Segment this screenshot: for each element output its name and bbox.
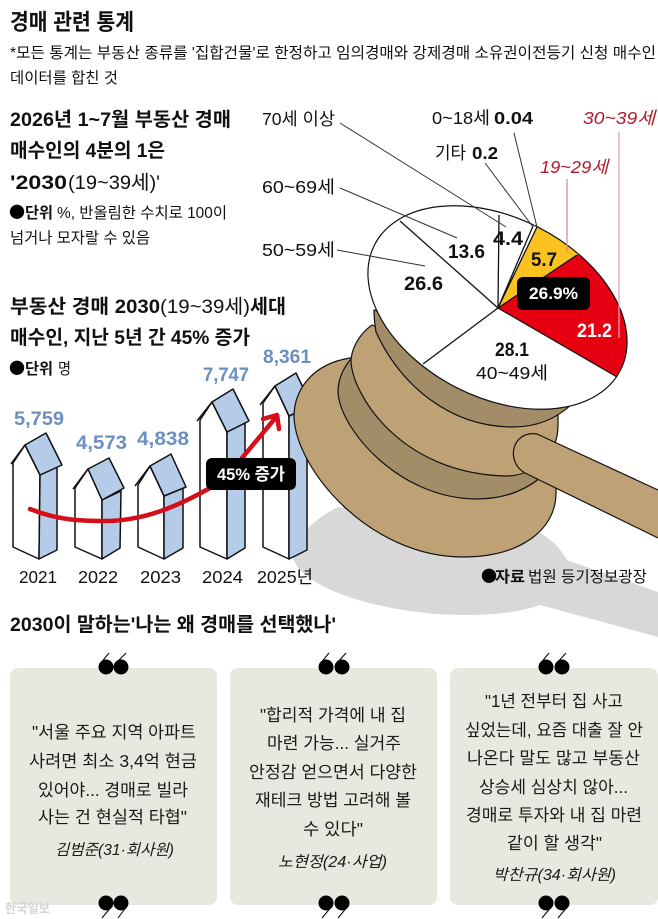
- quote text: "서울 주요 지역 아파트: [32, 722, 196, 742]
- year labels: 2021: [19, 567, 57, 587]
- unit note: bar chart: [9, 355, 71, 379]
- heading: pie chart: 2026년 1~7월 부동산 경매: [10, 109, 231, 131]
- subtitle note: [10, 44, 656, 87]
- pie base: [334, 165, 658, 450]
- unit note: pie chart: [9, 199, 227, 247]
- panel: quote 1: [10, 653, 217, 918]
- callout: 26.9%: [517, 277, 590, 310]
- watermark: 한국일보: [5, 901, 50, 916]
- value labels: 5,759: [14, 409, 64, 430]
- unit note: pie chart: ●: [9, 199, 25, 223]
- quote text: 있어야... 경매로 빌라: [38, 780, 188, 800]
- subtitle note: 데이터를 합친 것: [10, 69, 118, 87]
- year labels: 2024: [202, 567, 243, 587]
- heading: bar chart: (19~39세): [160, 296, 250, 318]
- unit note: bar chart: 단위: [25, 360, 53, 378]
- value labels: [14, 347, 311, 454]
- value labels: 4,838: [137, 429, 189, 450]
- year labels: 2023: [140, 567, 181, 587]
- house 2022: [73, 458, 124, 559]
- pie outline: [334, 165, 658, 450]
- icon: opening quote: [319, 653, 349, 674]
- source: 자료: [495, 568, 525, 586]
- panel: quote 2: [230, 653, 437, 918]
- pie labels: 0~18세: [432, 108, 490, 128]
- card background: [230, 668, 437, 905]
- heading: pie chart: (19~39세)': [68, 172, 160, 194]
- slice: 19~29 yellow: [500, 228, 578, 306]
- pie values: 4.4: [493, 229, 523, 250]
- quote text: 수 있다": [303, 819, 363, 839]
- house 2021: [11, 433, 62, 559]
- source: ●: [481, 563, 497, 587]
- subtitle note: *모든 통계는 부동산 종류를 '집합건물'로 한정하고 임의경매와 강제경매 소유권이전등기 신청 매수인: [10, 44, 656, 62]
- gavel upper head: [351, 325, 558, 476]
- card background: [10, 668, 217, 905]
- heading: pie chart: '2030: [10, 172, 67, 194]
- quote text: 경매로 투자와 내 집 마련: [466, 805, 642, 825]
- house 2024: [197, 389, 249, 559]
- unit note: pie chart: 넘거나 모자랄 수 있음: [10, 229, 150, 247]
- pie leader lines: [337, 123, 619, 338]
- quote text: 상승세 심상치 않아...: [479, 777, 628, 797]
- heading: bar chart: 세대: [250, 296, 286, 318]
- icon: closing quote: [539, 896, 569, 918]
- quote text: [465, 691, 643, 853]
- gavel lower head: [294, 350, 556, 557]
- quote text: 나온다 말도 많고 부동산: [467, 748, 640, 768]
- pie labels: 50~59세: [262, 240, 335, 260]
- quote text: "합리적 가격에 내 집: [260, 705, 406, 725]
- pie labels: 70세 이상: [262, 109, 335, 129]
- quote text: [249, 705, 417, 839]
- heading: bar chart: 부동산 경매 2030: [10, 296, 160, 318]
- heading: pie chart: 매수인의 4분의 1은: [10, 140, 165, 162]
- attribution: 노현정(24·사업): [278, 854, 387, 871]
- quote text: [29, 722, 197, 827]
- pie labels: 0.2: [472, 143, 498, 163]
- source: 법원 등기정보광장: [528, 568, 647, 586]
- pie values: 5.7: [531, 250, 557, 271]
- gavel shadow: [293, 507, 658, 637]
- quote text: 같이 할 생각": [507, 833, 602, 853]
- year labels: 2025년: [257, 567, 313, 587]
- house 2023: [135, 454, 186, 559]
- title: 경매 관련 통계: [10, 10, 134, 35]
- pie values: 26.6: [404, 274, 443, 295]
- heading: bar chart: 매수인, 지난 5년 간 45% 증가: [10, 327, 250, 349]
- quote text: 사려면 최소 3,4억 현금: [29, 751, 197, 771]
- gavel: [294, 310, 658, 557]
- callout: 45% increase: [206, 458, 296, 490]
- pie labels: [262, 108, 657, 260]
- unit note: bar chart: 명: [58, 360, 71, 378]
- icon: closing quote: [99, 896, 128, 918]
- quote text: 사는 건 현실적 타협": [38, 807, 187, 827]
- icon: closing quote: [319, 896, 349, 918]
- heading: bar chart: [10, 296, 286, 349]
- pie values: [404, 229, 612, 383]
- attribution: 박찬규(34·회사원): [493, 867, 616, 884]
- value labels: 4,573: [76, 433, 127, 454]
- quote text: "1년 전부터 집 사고: [485, 691, 623, 711]
- pie chart: [367, 205, 628, 410]
- pie labels: 기타: [435, 143, 466, 163]
- callout: 45% increase: 45% 증가: [217, 465, 285, 484]
- callout: 26.9%: 26.9%: [529, 284, 578, 303]
- year labels: 2022: [78, 567, 118, 587]
- attribution: 김범준(31·회사원): [55, 842, 174, 859]
- quote text: 싶었는데, 요즘 대출 잘 안: [465, 720, 643, 740]
- unit note: pie chart: %, 반올림한 수치로 100이: [57, 204, 227, 222]
- source: [481, 563, 647, 587]
- section heading: 2030이 말하는'나는 왜 경매를 선택했나': [10, 614, 336, 636]
- red growth arrow: [30, 415, 279, 521]
- value labels: 7,747: [203, 365, 249, 386]
- pie values: 28.1: [495, 340, 529, 361]
- gavel dark band: [338, 350, 550, 499]
- pie values: 40~49세: [476, 363, 548, 383]
- house 2025: [260, 373, 312, 559]
- slice: 30~39 red: [499, 254, 626, 376]
- unit note: pie chart: 단위: [25, 204, 53, 222]
- pie rim: [374, 310, 572, 427]
- unit note: bar chart: ●: [9, 355, 25, 379]
- value labels: 8,361: [263, 347, 311, 368]
- pie labels: 30~39세: [583, 108, 657, 128]
- heading: pie chart: [10, 109, 231, 194]
- card background: [450, 668, 658, 905]
- pie labels: 0.04: [494, 108, 533, 128]
- pie values: 13.6: [448, 242, 485, 263]
- gavel handle: [513, 434, 658, 538]
- quote text: 안정감 얻으면서 다양한: [249, 762, 417, 782]
- quote text: 마련 가능... 실거주: [267, 733, 401, 753]
- icon: opening quote: [99, 653, 128, 674]
- slice dividers: [400, 215, 617, 377]
- icon: opening quote: [539, 653, 569, 674]
- house bar chart: [11, 373, 312, 559]
- panel: quote 3: [450, 653, 658, 918]
- quote text: 재테크 방법 고려해 볼: [255, 790, 411, 810]
- pie values: 21.2: [577, 321, 612, 342]
- pie labels: 60~69세: [262, 177, 335, 197]
- pie labels: 19~29세: [540, 157, 610, 177]
- year labels: [19, 567, 313, 587]
